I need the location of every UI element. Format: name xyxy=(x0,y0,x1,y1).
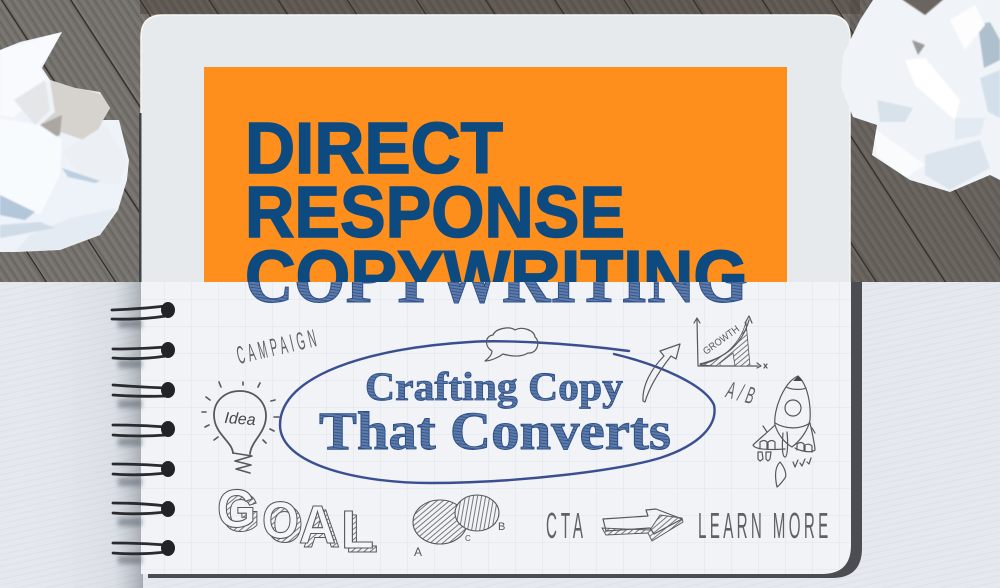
circled headline: crafting copy that converts xyxy=(280,341,715,483)
venn diagram: A xyxy=(414,545,422,559)
icon: idea light bulb: Idea xyxy=(224,410,256,429)
chart: growth sketch: GROWTH xyxy=(701,324,742,357)
title: direct response copywriting: DIRECT xyxy=(245,109,503,189)
icon: speech cloud xyxy=(485,328,538,361)
circled headline: crafting copy that converts: Crafting Copy xyxy=(365,364,623,409)
tablet xyxy=(139,15,850,282)
goal sketch lettering: L xyxy=(345,504,378,564)
goal sketch lettering: O xyxy=(266,496,303,554)
goal sketch lettering: G xyxy=(217,479,256,539)
lower desk surface xyxy=(0,282,1000,588)
circled headline: crafting copy that converts: That Converts xyxy=(319,401,671,461)
wood desk background xyxy=(0,0,1000,282)
goal sketch lettering: O xyxy=(262,492,299,550)
title: direct response copywriting xyxy=(247,122,747,304)
icon: idea light bulb xyxy=(202,382,279,473)
goal sketch lettering: A xyxy=(299,495,336,555)
venn diagram xyxy=(413,495,505,559)
goal sketch lettering: G xyxy=(221,483,260,543)
goal sketch lettering: A xyxy=(303,499,340,559)
goal sketch lettering: L xyxy=(341,500,374,560)
title: direct response copywriting: COPYWRITING xyxy=(245,237,748,319)
title: direct response copywriting: COPYWRITING xyxy=(245,237,748,317)
title: direct response copywriting: RESPONSE xyxy=(245,173,625,253)
spiral binding rings xyxy=(112,302,175,564)
icon: curved arrow xyxy=(643,344,680,402)
tablet screen xyxy=(204,67,787,282)
icon: outlined arrow xyxy=(602,509,683,541)
label: a/b: A/B xyxy=(723,377,757,410)
chart: growth sketch xyxy=(694,316,767,368)
notebook xyxy=(141,282,862,578)
icon: rocket xyxy=(753,376,815,487)
label: learn more: LEARN MORE xyxy=(698,505,828,546)
goal sketch lettering xyxy=(217,479,378,564)
crumpled paper left xyxy=(0,30,132,255)
label: campaign: CAMPAIGN xyxy=(234,326,319,370)
label: cta: CTA xyxy=(546,505,583,546)
venn diagram: B xyxy=(498,521,505,533)
venn diagram: C xyxy=(465,534,471,543)
crumpled paper right xyxy=(835,0,1000,195)
